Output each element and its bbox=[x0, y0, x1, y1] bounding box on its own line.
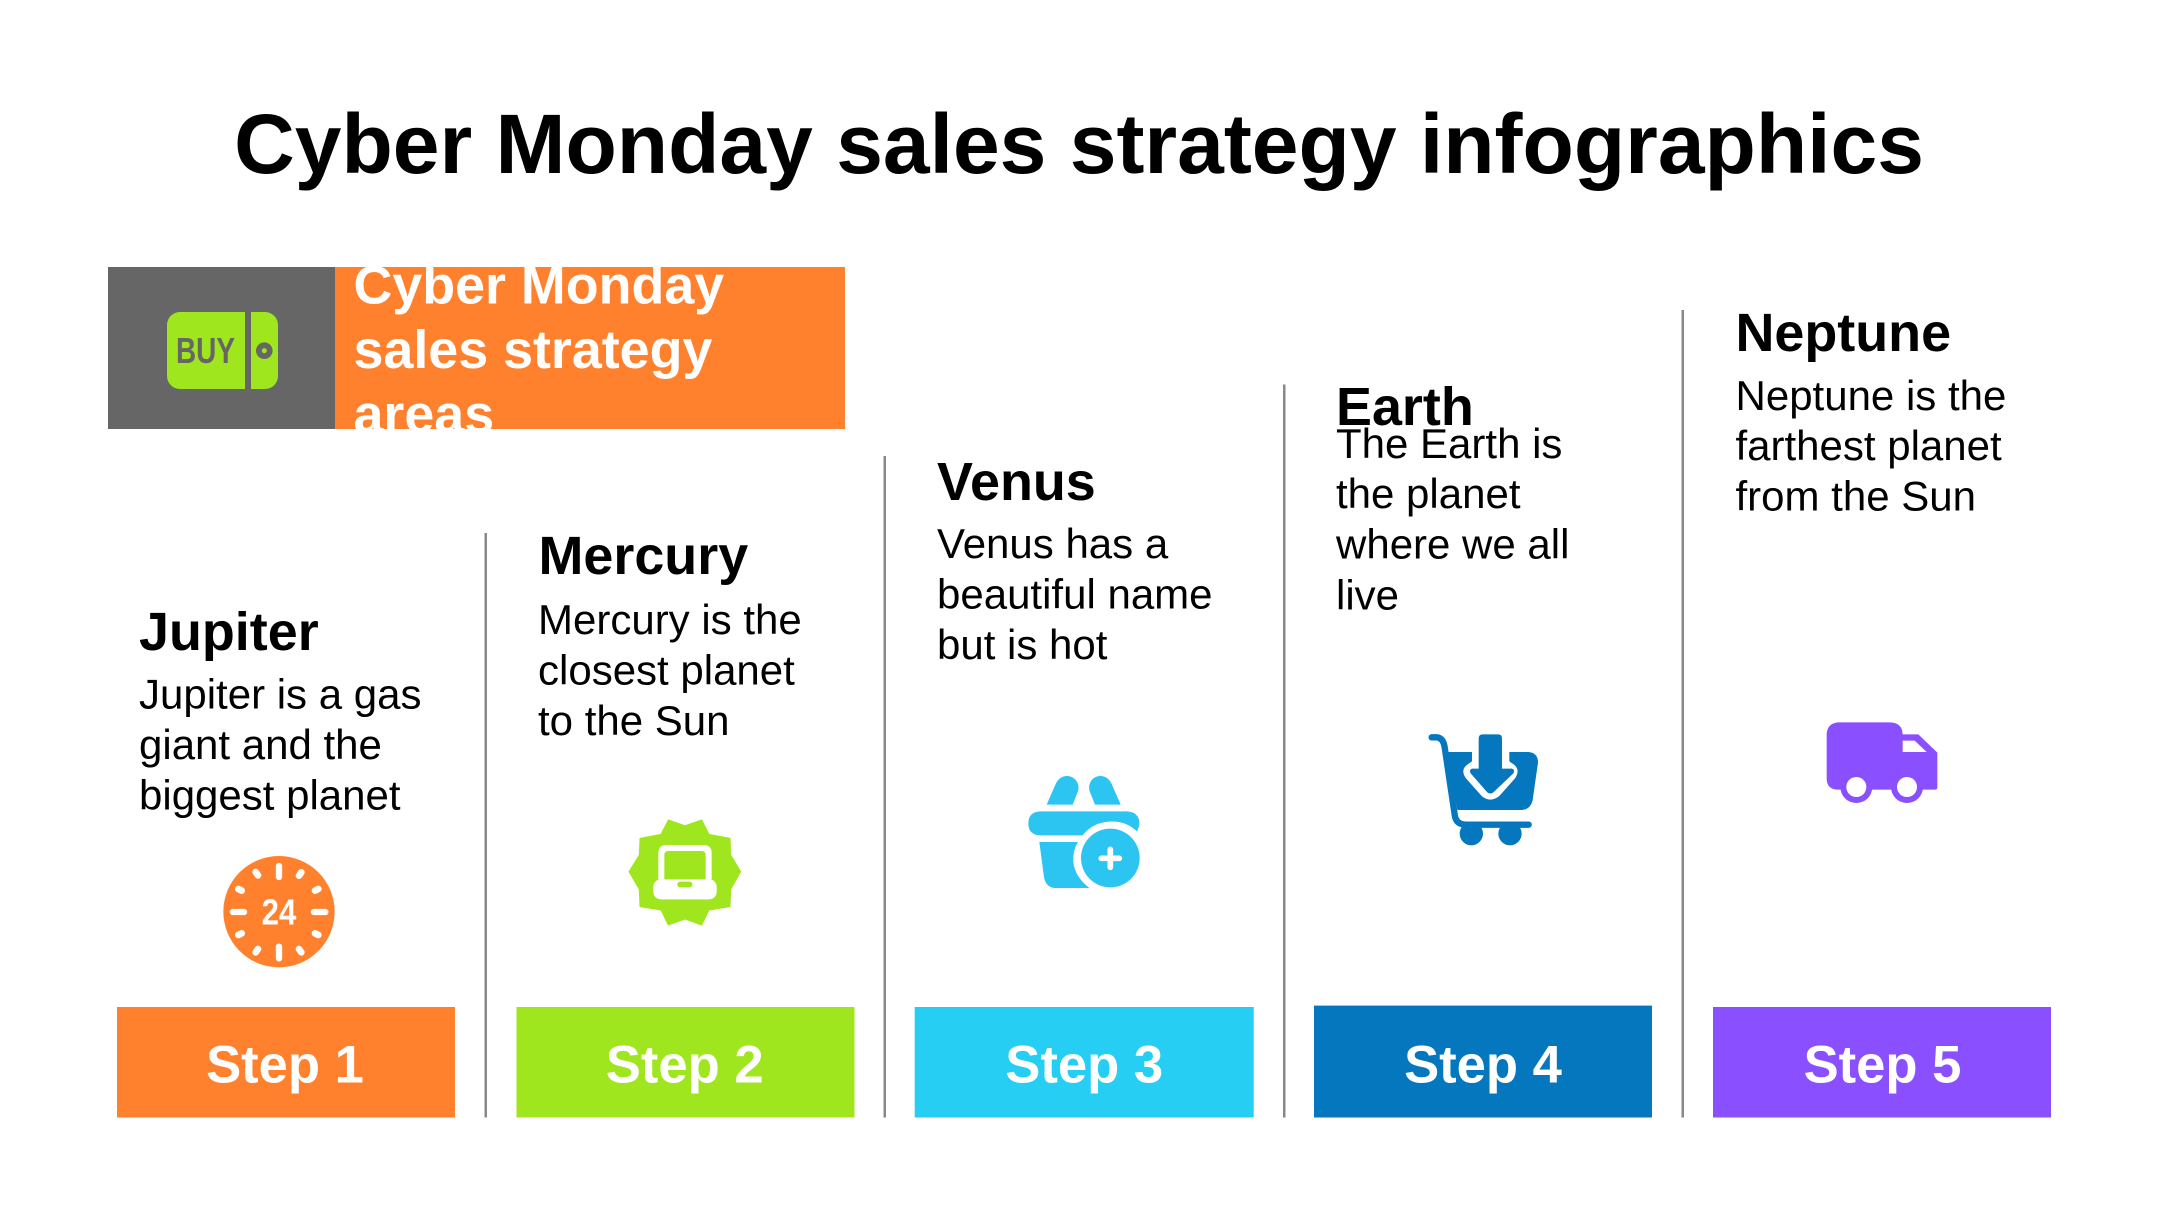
banner icon panel bbox=[108, 267, 335, 429]
column 5: Neptune bbox=[1713, 303, 2051, 1118]
icon: buy tag bbox=[167, 312, 278, 389]
icon: basket with plus bbox=[1028, 776, 1140, 888]
step 5 box: Step 5 bbox=[1804, 1036, 1961, 1094]
step 1 box bbox=[117, 1007, 455, 1118]
step 2 box bbox=[516, 1007, 854, 1118]
divider 1 bbox=[484, 533, 487, 1118]
text: Venus description: but is hot bbox=[937, 621, 1108, 668]
text: Mercury description: to the Sun bbox=[538, 697, 729, 744]
text: Earth description: live bbox=[1336, 572, 1399, 618]
heading: Jupiter: Jupiter bbox=[139, 602, 319, 662]
text: Neptune description bbox=[1736, 372, 2006, 520]
divider 4 bbox=[1682, 310, 1684, 1118]
divider 3 bbox=[1283, 384, 1286, 1118]
column 4: Earth bbox=[1314, 377, 1652, 1118]
icon: buy tag: BUY bbox=[176, 330, 235, 371]
step 4 box bbox=[1314, 1006, 1652, 1118]
banner text: sales strategy bbox=[354, 320, 712, 380]
text: Neptune description: Neptune is the bbox=[1736, 372, 2006, 419]
text: Venus description: beautiful name bbox=[937, 570, 1213, 618]
banner: sales strategy areas bbox=[108, 267, 845, 429]
banner text: areas bbox=[354, 384, 494, 444]
banner text: Cyber Monday bbox=[354, 256, 724, 316]
column 2: Mercury bbox=[516, 526, 854, 1118]
text: Jupiter description bbox=[139, 670, 421, 818]
text: Jupiter description: giant and the bbox=[139, 721, 382, 768]
banner text panel bbox=[335, 267, 845, 429]
icon: cart with download arrow bbox=[1432, 734, 1538, 845]
heading: Neptune: Neptune bbox=[1736, 303, 1951, 363]
heading: Venus: Venus bbox=[937, 452, 1096, 512]
text: Earth description: where we all bbox=[1335, 520, 1569, 568]
step 1 box: Step 1 bbox=[206, 1036, 364, 1094]
icon: laptop badge bbox=[629, 820, 741, 925]
text: Jupiter description: Jupiter is a gas bbox=[139, 670, 421, 718]
step 5 box bbox=[1713, 1007, 2051, 1118]
text: Venus description bbox=[937, 520, 1213, 668]
icon: delivery truck bbox=[1827, 722, 1937, 803]
text: Neptune description: from the Sun bbox=[1736, 472, 1976, 520]
text: Earth description bbox=[1335, 420, 1569, 618]
column 1: Jupiter bbox=[117, 602, 455, 1118]
title: Cyber Monday sales strategy infographics bbox=[234, 97, 1924, 191]
divider 2 bbox=[884, 456, 886, 1118]
heading: Mercury: Mercury bbox=[538, 526, 748, 586]
banner text bbox=[355, 267, 724, 429]
text: Mercury description: closest planet bbox=[538, 646, 795, 694]
text: Neptune description: farthest planet bbox=[1736, 422, 2002, 469]
step 3 box: Step 3 bbox=[1005, 1036, 1163, 1094]
step 3 box bbox=[915, 1007, 1254, 1118]
text: Earth description: The Earth is bbox=[1336, 420, 1562, 467]
text: Venus description: Venus has a bbox=[937, 520, 1169, 567]
text: Jupiter description: biggest planet bbox=[139, 772, 401, 818]
icon: 24 hour clock bbox=[223, 856, 335, 967]
text: Mercury description bbox=[538, 596, 802, 744]
step 2 box: Step 2 bbox=[606, 1036, 764, 1094]
text: Earth description: the planet bbox=[1336, 470, 1521, 517]
icon: 24 hour clock: 24 bbox=[262, 892, 296, 933]
text: Mercury description: Mercury is the bbox=[538, 596, 802, 643]
column 3: Venus bbox=[915, 452, 1254, 1118]
step 4 box: Step 4 bbox=[1404, 1036, 1562, 1094]
heading: Earth: Earth bbox=[1336, 377, 1474, 437]
